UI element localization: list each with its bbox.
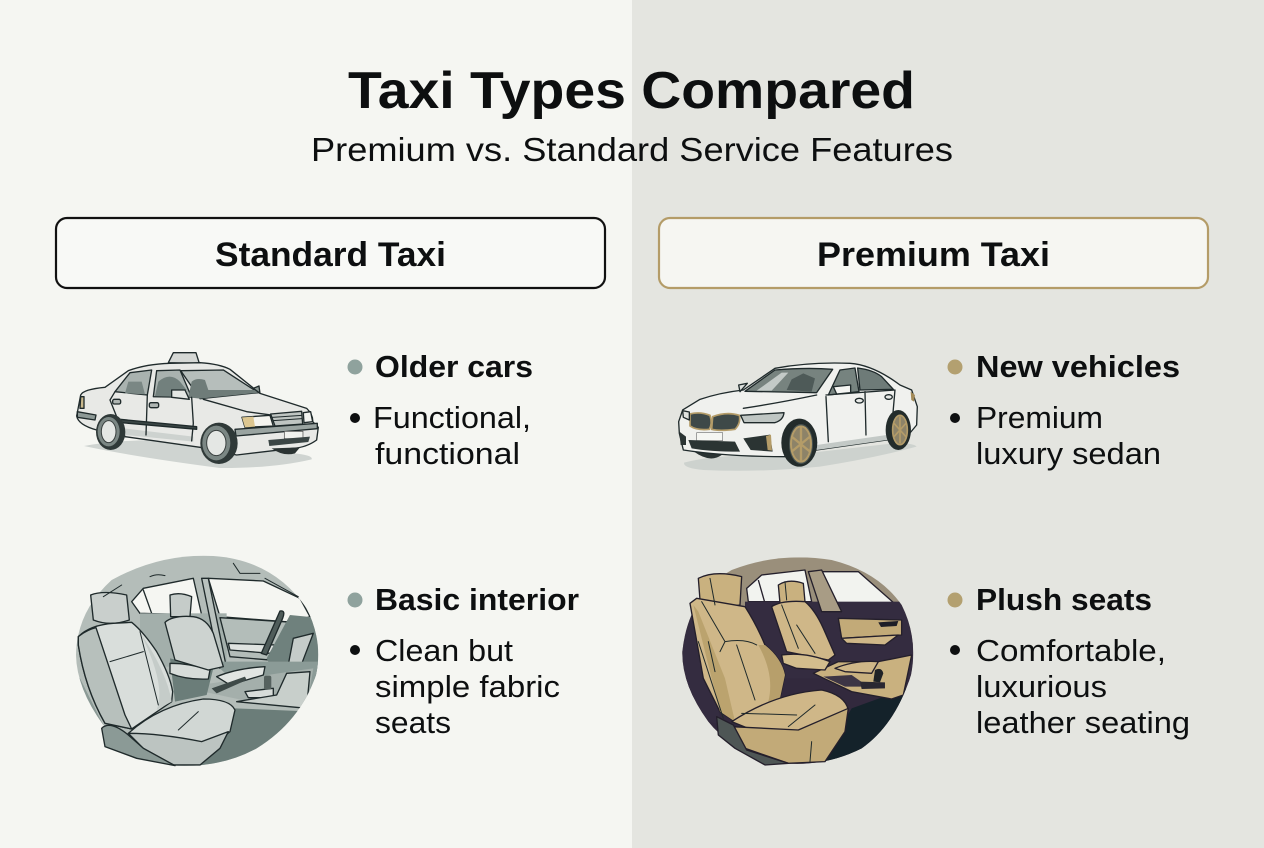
feature: older cars — [348, 350, 533, 471]
feature: plush seats: leather seating — [976, 706, 1190, 740]
feature: plush seats: Comfortable, — [976, 634, 1166, 668]
feature: new vehicles — [948, 350, 1180, 471]
icon: premium interior seats — [682, 558, 914, 766]
feature: basic interior: simple fabric — [375, 670, 560, 704]
feature: new vehicles: New vehicles — [976, 350, 1180, 384]
feature: basic interior: Basic interior — [375, 583, 579, 617]
feature: plush seats: luxurious — [976, 670, 1107, 704]
panel heading: Premium Taxi: Premium Taxi — [817, 236, 1050, 274]
feature: basic interior: seats — [375, 706, 451, 740]
feature: new vehicles: luxury sedan — [976, 437, 1161, 471]
feature: basic interior: Clean but — [375, 634, 514, 668]
feature: older cars: functional — [375, 437, 520, 471]
panel heading: Standard Taxi: Standard Taxi — [215, 236, 446, 274]
panel heading: Premium Taxi — [659, 218, 1208, 288]
panel heading: Standard Taxi — [56, 218, 605, 288]
icon: premium sedan car — [679, 363, 917, 471]
feature: basic interior — [348, 583, 579, 740]
subtitle: Premium vs. Standard Service Features — [311, 131, 953, 168]
feature: plush seats: Plush seats — [976, 583, 1152, 617]
icon: standard interior seats — [76, 556, 318, 766]
feature: older cars: Older cars — [375, 350, 533, 384]
feature: new vehicles: Premium — [976, 401, 1103, 435]
feature: older cars: Functional, — [373, 401, 531, 435]
title: Taxi Types Compared — [348, 62, 915, 120]
icon: standard taxi car — [77, 353, 318, 468]
feature: plush seats — [948, 583, 1190, 740]
